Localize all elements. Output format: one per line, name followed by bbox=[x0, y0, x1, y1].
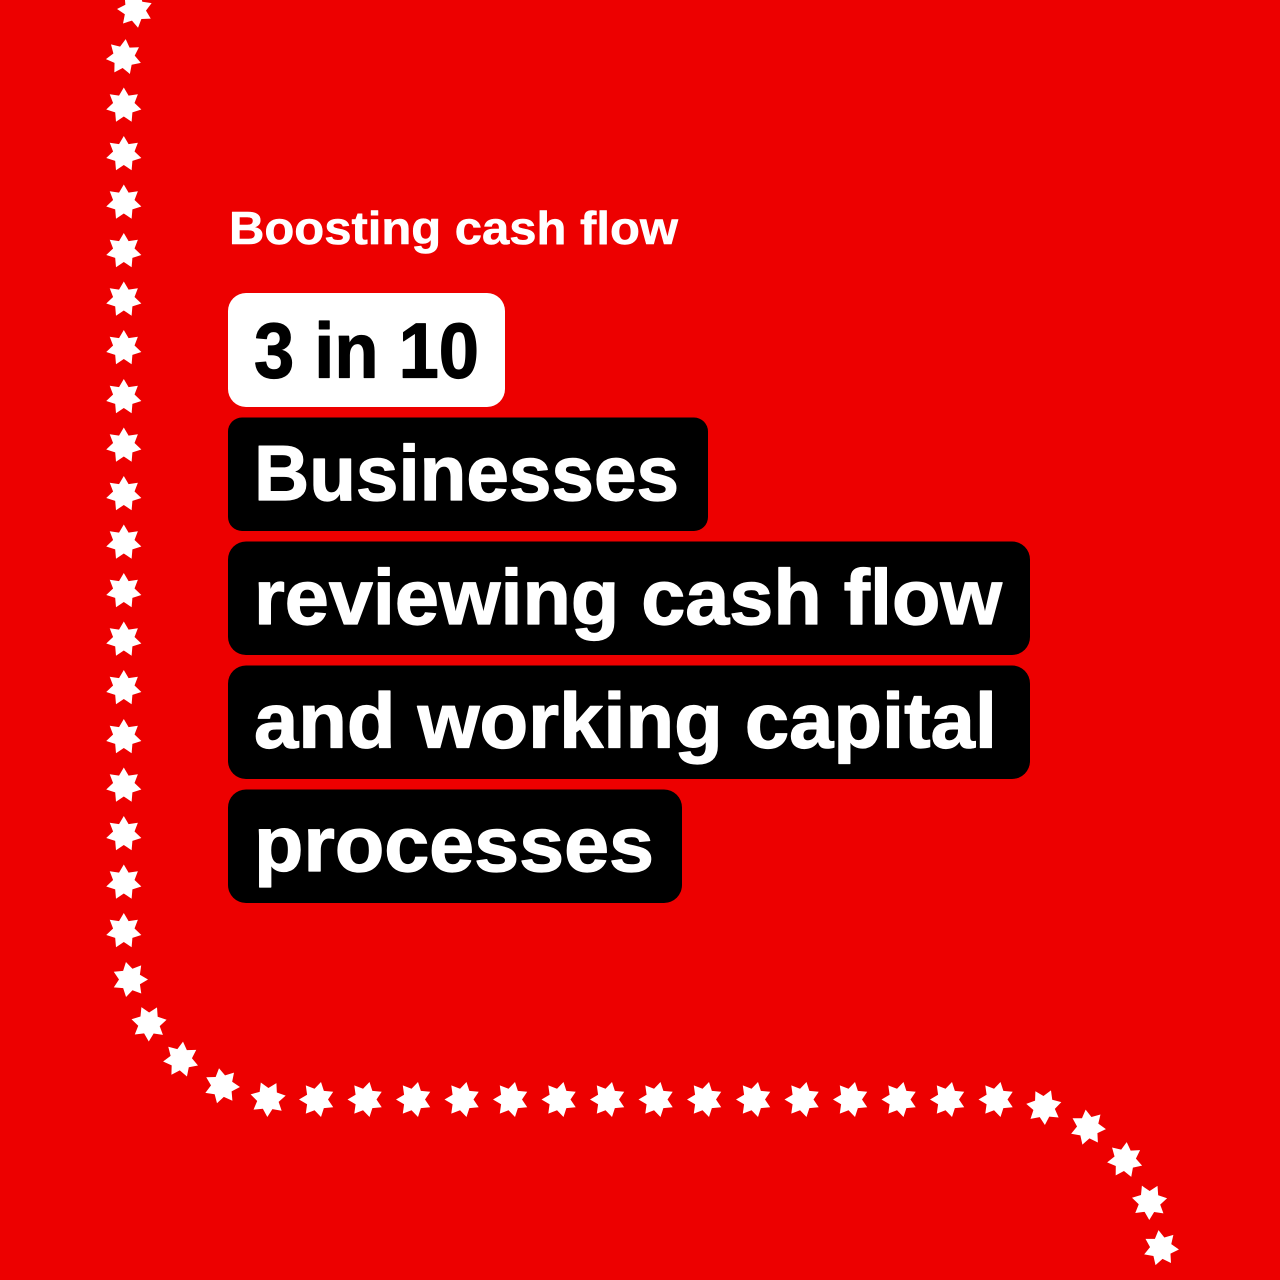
headline line: reviewing cash flow: reviewing cash flow bbox=[254, 553, 1002, 641]
headline line: processes bbox=[228, 790, 682, 903]
headline line: and working capital: and working capital bbox=[254, 676, 997, 764]
headline line: processes: processes bbox=[254, 800, 654, 888]
highlight: 3 in 10: 3 in 10 bbox=[254, 306, 479, 394]
highlight: 3 in 10 bbox=[228, 293, 505, 407]
headline line: Businesses: Businesses bbox=[254, 429, 679, 517]
subtitle: Boosting cash flow bbox=[229, 202, 678, 254]
